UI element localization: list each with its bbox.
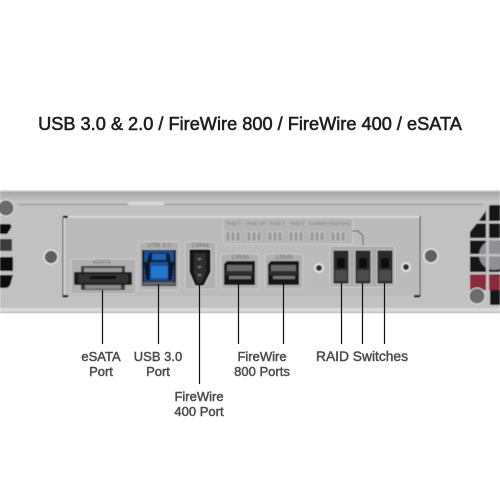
label: USB 3.0 Port: USB 3.0 [134,349,182,364]
USB 3.0 port [139,242,179,290]
label: FireWire 800 Ports [234,349,290,379]
FireWire 800 port 2: 1394b [275,254,293,261]
title: USB 3.0 & 2.0 / FireWire 800 / FireWire 400 / eSATA [38,114,463,134]
eSATA port: eSATA [93,260,111,266]
label: USB 3.0 Port [134,349,182,379]
port panel [63,216,420,297]
RAID settings label block: RAID 3 [270,221,285,226]
eSATA port [71,259,136,294]
RAID settings label block: Combine [309,221,328,226]
FireWire 800 port 2 [265,254,303,289]
RAID settings label block: RAID 0 [226,221,241,226]
leader lines [102,283,384,384]
label: eSATA Port: eSATA [81,349,121,364]
RAID switches [330,246,395,287]
FireWire 400 port: 1394a [191,242,209,249]
label: eSATA Port [81,349,121,379]
right vent [469,205,500,305]
chassis screws [0,200,485,304]
label: eSATA Port: Port [89,364,113,379]
RAID settings label block: Clear RAID [328,221,352,226]
label: FireWire 400 Port: 400 Port [174,404,224,419]
USB 3.0 port: USB 3.0 [147,242,171,249]
FireWire 800 port 1 [221,254,259,289]
label: FireWire 400 Port: FireWire [174,389,224,404]
label: USB 3.0 Port: Port [146,364,170,379]
left vent [0,224,13,288]
label: FireWire 800 Ports: 800 Ports [234,364,290,379]
label: RAID Switches: RAID Switches [316,349,408,364]
FireWire 400 port [185,242,216,289]
label: FireWire 400 Port [174,389,224,419]
RAID settings label block: RAID 1/0 [247,221,266,226]
panel screws [314,262,411,273]
RAID settings label block: RAID 5 [290,221,305,226]
FireWire 800 port 1: 1394b [231,254,249,261]
RAID settings label block [223,218,363,246]
label: FireWire 800 Ports: FireWire [237,349,287,364]
device chassis [0,190,500,313]
